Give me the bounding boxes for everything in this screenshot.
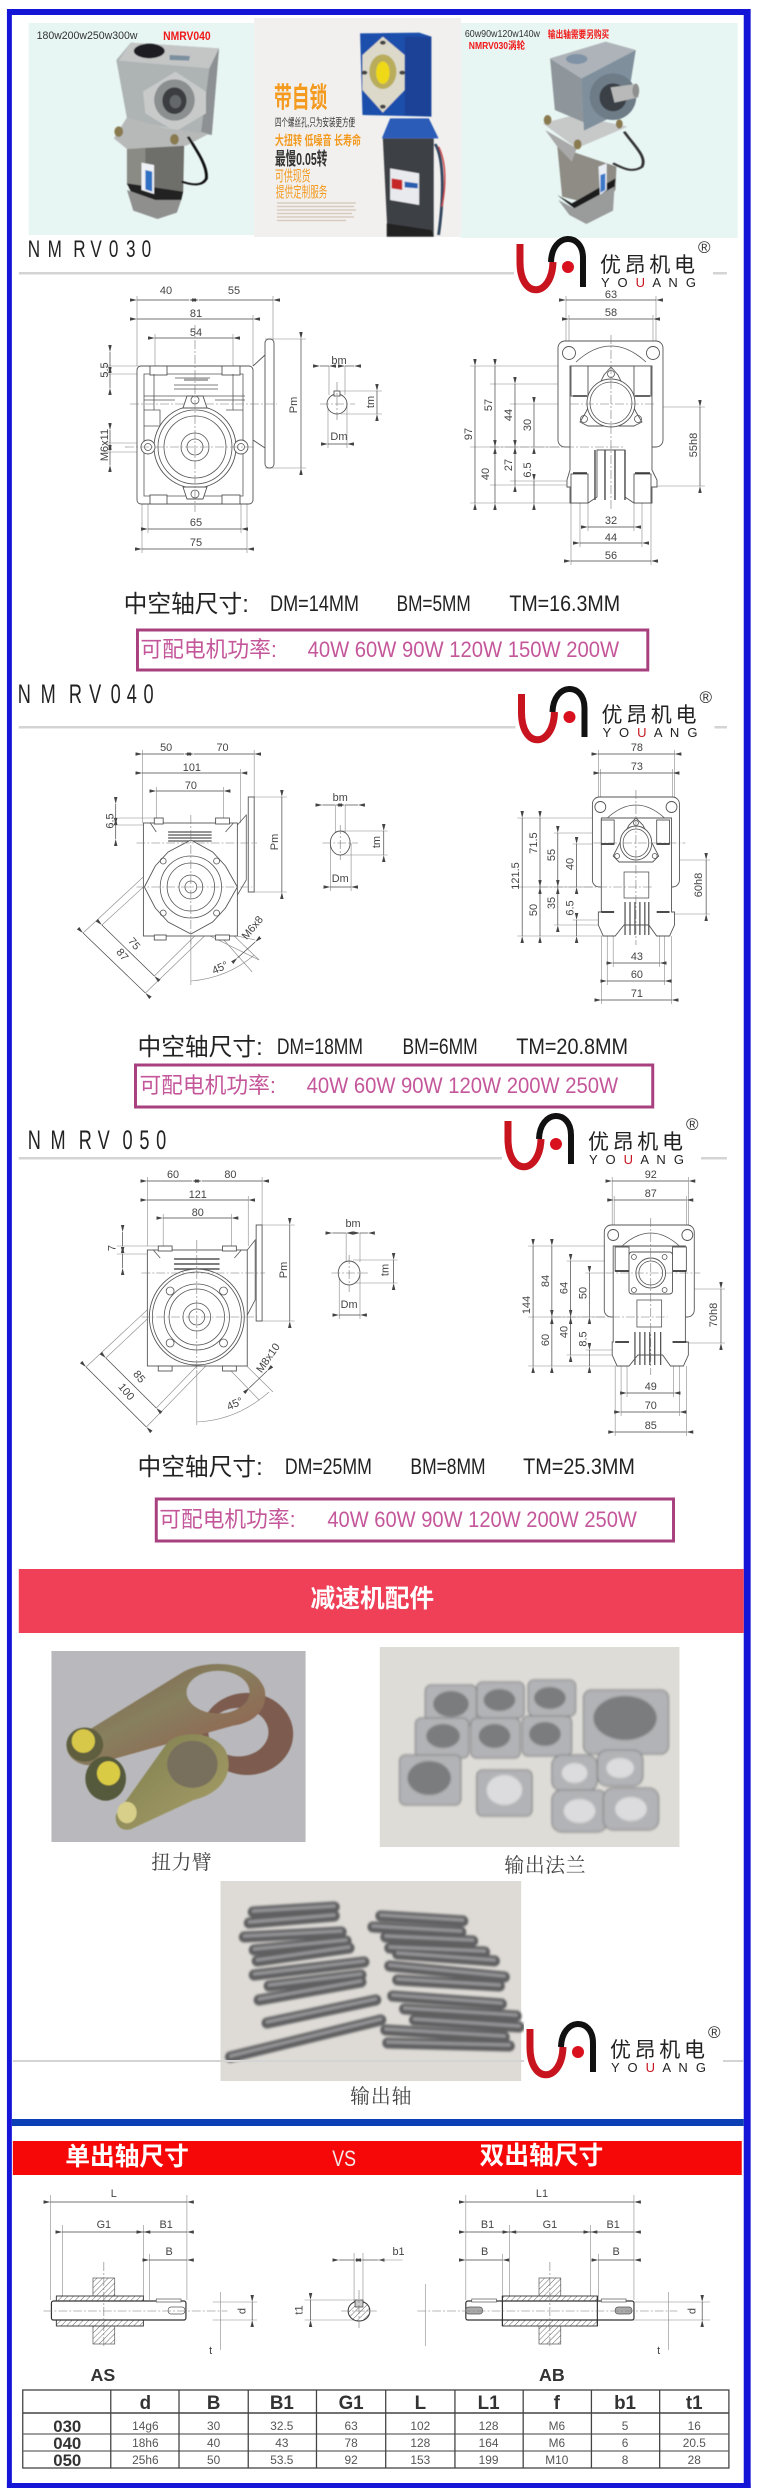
drawing: NMRV050 front view <box>86 1169 295 1427</box>
row 040: 78 <box>344 2436 358 2450</box>
logo: Youang accessories: ® <box>708 2023 721 2042</box>
spec: NMRV050 hollow shaft size: BM=8MM <box>410 1454 486 1479</box>
logo: Youang 050 <box>502 1115 701 1169</box>
promo line: custom service: 提供定制服务 <box>276 184 327 201</box>
dimension values: 70h8 <box>708 1303 720 1327</box>
callout: NMRV030 motor power: 40W 60W 90W 120W 150W 200W <box>308 637 619 662</box>
dimension lines <box>517 750 710 1004</box>
drawing: AB double output shaft: B <box>613 2246 620 2258</box>
logo: Youang 030 <box>514 238 713 292</box>
row 030: M6 <box>549 2419 565 2433</box>
logo: Youang 040: 优昂机电 <box>601 704 696 727</box>
dimension values: 85 <box>645 1420 657 1432</box>
dimension values: 40 <box>480 468 492 480</box>
callout: NMRV030 motor power: 可配电机功率: <box>140 637 277 662</box>
dimension values <box>510 742 705 1000</box>
table header: B <box>207 2393 220 2414</box>
row 030: 30 <box>207 2419 221 2433</box>
table header: B1 <box>270 2393 294 2414</box>
dimension values: 144 <box>521 1296 533 1314</box>
logo: Youang 050: Y O U A N G <box>589 1152 684 1167</box>
photo: torque arm <box>51 1651 306 1842</box>
dimension values: 57 <box>483 399 495 411</box>
spec: NMRV030 hollow shaft size <box>124 591 620 618</box>
drawing: NMRV050 keyway section: tm <box>380 1264 392 1276</box>
drawing: NMRV030 front view <box>99 285 306 553</box>
callout: NMRV050 motor power: 可配电机功率: <box>159 1507 296 1532</box>
dimension values: 50 <box>160 742 172 754</box>
spec: NMRV040 hollow shaft size: TM=20.8MM <box>516 1034 628 1059</box>
gearbox body <box>141 1225 265 1375</box>
logo: Youang 050: ® <box>686 1115 699 1134</box>
row 050 <box>53 2451 701 2470</box>
spec: NMRV050 hollow shaft size: TM=25.3MM <box>523 1454 635 1479</box>
row 050: 199 <box>479 2453 499 2467</box>
dimension values: 5.5 <box>99 362 111 378</box>
dimension values: 7 <box>107 1245 119 1251</box>
dimension values: 60 <box>167 1169 179 1181</box>
drawing: NMRV030 keyway section: tm <box>365 396 377 408</box>
drawing: NMRV040 front view <box>83 742 287 993</box>
dimension values: 87 <box>645 1188 657 1200</box>
drawing: AS single output shaft: L <box>111 2188 117 2200</box>
dimension values: 75 <box>190 537 202 549</box>
banner: single vs double output shaft: 单出轴尺寸 <box>65 2143 189 2171</box>
dimension lines <box>83 750 287 993</box>
drawing: AB double output shaft: B <box>481 2246 488 2258</box>
dimension values: 81 <box>190 308 202 320</box>
dimension values <box>463 289 700 562</box>
dimension values: 73 <box>631 761 643 773</box>
row 040: 6 <box>622 2436 629 2450</box>
drawing: AS single output shaft: B <box>165 2246 173 2258</box>
dimension values: 60 <box>540 1334 552 1346</box>
spec: NMRV050 hollow shaft size <box>137 1454 635 1481</box>
dimension values: 8.5 <box>578 1331 589 1347</box>
logo: Youang 040 <box>515 688 714 742</box>
dimension values: Pm <box>269 834 281 850</box>
dimension values: Pm <box>278 1262 290 1278</box>
dimension values: 78 <box>631 742 643 754</box>
spec: NMRV050 hollow shaft size: DM=25MM <box>285 1454 372 1479</box>
table header: f <box>554 2393 561 2414</box>
drawing: NMRV050 keyway section: Dm <box>341 1299 358 1311</box>
dimension values: 32 <box>605 515 617 527</box>
promo line: screw holes: 四个螺丝孔,只为安装更方便 <box>275 115 355 129</box>
dimension values: 45° <box>225 1395 245 1413</box>
dimension values: 70 <box>185 780 197 792</box>
section rule NMRV050 <box>19 1157 727 1160</box>
row 030: 14g6 <box>132 2419 159 2433</box>
row 040: M6 <box>549 2436 565 2450</box>
dimension lines <box>86 1177 295 1427</box>
spec: NMRV050 hollow shaft size: 中空轴尺寸: <box>137 1454 263 1481</box>
promo fine print <box>277 203 356 220</box>
callout: NMRV050 motor power: 40W 60W 90W 120W 200W 250W <box>327 1507 637 1532</box>
dimension values: 101 <box>183 762 201 774</box>
dimension values: 40 <box>565 858 577 870</box>
dimension values: 65 <box>190 517 202 529</box>
gearbox side body <box>490 335 663 510</box>
dimension values: 56 <box>605 550 617 562</box>
table: shaft dimensions <box>23 2390 729 2470</box>
icon: center blue gear motor <box>360 33 445 237</box>
row 030: 102 <box>410 2419 431 2433</box>
logo: Youang 050: 优昂机电 <box>588 1131 683 1154</box>
row 040: 18h6 <box>132 2436 159 2450</box>
left photo power text: 180w200w250w300w <box>37 30 138 42</box>
row 040: 164 <box>479 2436 499 2450</box>
divider bar <box>12 2119 744 2126</box>
drawing: keyway section: t1 <box>294 2305 306 2315</box>
logo: Youang accessories <box>524 2023 723 2077</box>
drawing: AS single output shaft <box>44 2188 257 2357</box>
row 050: 8 <box>622 2453 629 2467</box>
dimension values: M8x10 <box>254 1341 283 1375</box>
table header: L1 <box>478 2393 500 2414</box>
spec: NMRV040 hollow shaft size: BM=6MM <box>403 1034 478 1059</box>
dimension values: 6.5 <box>565 900 577 916</box>
dimension values: 49 <box>645 1381 657 1393</box>
dimension values: Pm <box>288 397 300 413</box>
right photo power text: 60w90w120w140w <box>465 29 541 40</box>
drawing: NMRV050 keyway section <box>331 1218 398 1319</box>
callout: NMRV040 motor power <box>135 1065 653 1107</box>
drawing: NMRV040 side view <box>510 742 710 1004</box>
spec: NMRV030 hollow shaft size: TM=16.3MM <box>509 591 620 616</box>
panel: center promo background <box>254 18 461 237</box>
spec: NMRV030 hollow shaft size: BM=5MM <box>397 591 471 616</box>
drawing: NMRV040 keyway section: tm <box>371 836 383 848</box>
heading: NMRV030: NMRV030 <box>28 236 151 263</box>
dimension values: 100 <box>116 1381 136 1403</box>
dimension values: 63 <box>605 289 617 301</box>
panel: right motor photo background <box>461 23 738 238</box>
row 030: 128 <box>479 2419 499 2433</box>
logo: Youang 040: Y O U A N G <box>602 725 697 740</box>
right photo model text: NMRV030涡轮 <box>469 39 525 52</box>
dimension values: 35 <box>546 897 558 909</box>
drawing: NMRV040 keyway section <box>322 792 388 891</box>
dimension lines <box>104 296 306 553</box>
row 050: 28 <box>688 2453 701 2467</box>
row 050: 25h6 <box>132 2453 159 2467</box>
row 050: 53.5 <box>270 2453 294 2467</box>
drawing: NMRV040 keyway section: Dm <box>332 873 349 885</box>
row 040: 40 <box>207 2436 221 2450</box>
promo line: torque: 大扭转 低噪音 长寿命 <box>275 133 361 148</box>
dimension values: 121 <box>189 1189 207 1201</box>
drawing: AB double output shaft: L1 <box>536 2188 548 2200</box>
row 030: 5 <box>622 2419 629 2433</box>
caption: output flange: 输出法兰 <box>504 1855 586 1877</box>
label: AS: AS <box>90 2365 115 2385</box>
table header: G1 <box>339 2393 364 2414</box>
caption: output shaft: 输出轴 <box>350 2086 412 2108</box>
dimension values: 55 <box>546 849 558 861</box>
spec: NMRV040 hollow shaft size <box>137 1034 628 1061</box>
dimension values <box>99 285 300 549</box>
dimension values: 60h8 <box>693 873 705 897</box>
logo: Youang 030: 优昂机电 <box>600 254 695 277</box>
dimension values: 85 <box>130 1369 147 1386</box>
icon: left silver gear motor <box>114 43 219 219</box>
dimension values: 75 <box>125 936 142 953</box>
dimension values: 27 <box>503 459 515 471</box>
drawing: AS single output shaft: G1 <box>97 2219 111 2231</box>
callout: NMRV030 motor power <box>137 630 648 670</box>
dimension values: 55 <box>228 285 240 297</box>
row 030: 16 <box>688 2419 701 2433</box>
dimension values: 60 <box>631 969 643 981</box>
dimension lines <box>470 296 705 565</box>
dimension values: 43 <box>631 951 643 963</box>
table header: b1 <box>614 2393 636 2414</box>
dimension values: 58 <box>605 307 617 319</box>
dimension values: 50 <box>578 1287 589 1299</box>
dimension lines <box>528 1177 725 1436</box>
dimension values: 70 <box>216 742 229 754</box>
dimension values: 80 <box>192 1207 204 1219</box>
dimension values: 40 <box>160 285 172 297</box>
drawing: AB double output shaft: B1 <box>481 2219 494 2231</box>
drawing: NMRV040 keyway section: bm <box>333 792 348 804</box>
dimension values: 40 <box>559 1326 571 1338</box>
heading: NMRV050: NMRV050 <box>28 1124 166 1155</box>
dimension values: 97 <box>463 428 475 440</box>
dimension values: 54 <box>190 327 202 339</box>
dimension values: 80 <box>224 1169 236 1181</box>
table header: L <box>415 2393 426 2414</box>
drawing: AB double output shaft: t <box>657 2345 660 2357</box>
drawing: keyway section <box>294 2246 405 2328</box>
gearbox body <box>125 325 277 512</box>
logo: Youang 030: Y O U A N G <box>601 275 696 290</box>
row 050: 050 <box>53 2451 81 2470</box>
row 050: M10 <box>545 2453 569 2467</box>
table header: t1 <box>686 2393 703 2414</box>
drawing: keyway section: b1 <box>393 2246 405 2258</box>
banner: reducer accessories <box>19 1569 744 1633</box>
dimension values: M6x8 <box>240 914 266 942</box>
dimension values: 44 <box>503 409 515 421</box>
dimension values: 71.5 <box>528 832 540 854</box>
drawing: AB double output shaft: B1 <box>607 2219 620 2231</box>
row 050: 92 <box>344 2453 358 2467</box>
dimension values: 71 <box>631 988 643 1000</box>
drawing: AB double output shaft: G1 <box>543 2219 557 2231</box>
row 040: 040 <box>53 2434 81 2453</box>
callout: NMRV040 motor power: 40W 60W 90W 120W 200W 250W <box>307 1073 618 1098</box>
row 030: 63 <box>344 2419 358 2433</box>
drawing: AB double output shaft <box>417 2188 710 2357</box>
row 040: 43 <box>275 2436 289 2450</box>
drawing: AS single output shaft: B1 <box>160 2219 173 2231</box>
spec: NMRV040 hollow shaft size: DM=18MM <box>277 1034 363 1059</box>
logo: Youang 040: ® <box>699 688 712 707</box>
banner: single vs double output shaft: VS <box>332 2146 356 2171</box>
drawing: NMRV030 keyway section: Dm <box>330 431 348 443</box>
dimension values: 30 <box>522 419 534 431</box>
dimension values: 84 <box>540 1275 552 1287</box>
row 040: 128 <box>410 2436 431 2450</box>
row 030: 030 <box>53 2417 81 2436</box>
drawing: AB double output shaft: d <box>686 2308 698 2314</box>
row 050: 153 <box>410 2453 431 2467</box>
dimension values: 70 <box>645 1400 657 1412</box>
row 030: 32.5 <box>270 2419 294 2433</box>
logo: Youang 030: ® <box>698 238 711 257</box>
callout: NMRV040 motor power: 可配电机功率: <box>139 1073 276 1098</box>
right photo note: 输出轴需要另购买 <box>548 28 609 41</box>
panel: product photo banner <box>29 18 738 238</box>
row 040 <box>53 2434 706 2453</box>
dimension values: 6.5 <box>522 462 534 478</box>
drawing: NMRV050 keyway section: bm <box>346 1218 361 1230</box>
drawing: NMRV030 keyway section: bm <box>331 355 347 367</box>
table grid <box>23 2390 729 2468</box>
dimension values: 92 <box>645 1169 657 1181</box>
callout: NMRV050 motor power <box>156 1499 674 1541</box>
drawing: NMRV050 side view <box>521 1169 725 1436</box>
drawing: NMRV030 side view <box>463 289 705 565</box>
dimension values: 64 <box>559 1282 571 1294</box>
promo line: speed: 最慢0.05转 <box>275 149 327 169</box>
gearbox side body <box>552 1218 700 1375</box>
dimension values <box>521 1169 720 1432</box>
dimension values: 6.5 <box>105 813 117 829</box>
section rule NMRV040 <box>19 726 727 728</box>
promo headline: 带自锁 <box>274 82 327 113</box>
drawing: NMRV030 keyway section <box>320 355 382 448</box>
section rule accessories <box>13 2060 744 2062</box>
row 050: 50 <box>207 2453 221 2467</box>
logo: Youang accessories: Y O U A N G <box>611 2060 706 2075</box>
caption: torque arm: 扭力臂 <box>151 1852 212 1874</box>
table header: d <box>140 2393 151 2414</box>
row 030 <box>53 2417 701 2436</box>
heading: NMRV040: NMRV040 <box>18 678 154 709</box>
label: AB: AB <box>539 2365 565 2385</box>
section rule NMRV030 <box>19 272 727 274</box>
dimension values: 87 <box>113 947 130 964</box>
spec: NMRV040 hollow shaft size: 中空轴尺寸: <box>137 1034 263 1061</box>
spec: NMRV030 hollow shaft size: DM=14MM <box>270 591 359 616</box>
photo: output shaft <box>221 1881 521 2081</box>
dimension values <box>107 1169 290 1413</box>
icon: right silver gear motor <box>543 42 643 224</box>
photo: output flange <box>380 1647 679 1847</box>
table header <box>140 2393 703 2414</box>
spec: NMRV030 hollow shaft size: 中空轴尺寸: <box>124 591 249 618</box>
dimension values: M6x11 <box>99 429 111 461</box>
panel: left motor photo background <box>29 23 254 235</box>
dimension values: 50 <box>528 904 540 916</box>
banner: single vs double output shaft <box>13 2141 742 2175</box>
dimension values: 55h8 <box>688 433 700 457</box>
gearbox side body <box>539 790 685 945</box>
banner: reducer accessories: 减速机配件 <box>311 1585 434 1613</box>
logo: Youang accessories: 优昂机电 <box>610 2039 705 2062</box>
dimension values: 44 <box>605 532 617 544</box>
row 040: 20.5 <box>683 2436 706 2450</box>
left photo model text: NMRV040 <box>163 29 211 43</box>
drawing: AS single output shaft: d <box>236 2308 248 2314</box>
dimension values: 121.5 <box>510 862 522 890</box>
promo line: stock: 可供现货 <box>275 168 311 185</box>
banner: single vs double output shaft: 双出轴尺寸 <box>480 2142 603 2170</box>
dimension values: 45° <box>210 959 230 977</box>
gearbox body <box>136 797 257 945</box>
dimension values <box>105 742 281 977</box>
drawing: AS single output shaft: t <box>209 2345 212 2357</box>
